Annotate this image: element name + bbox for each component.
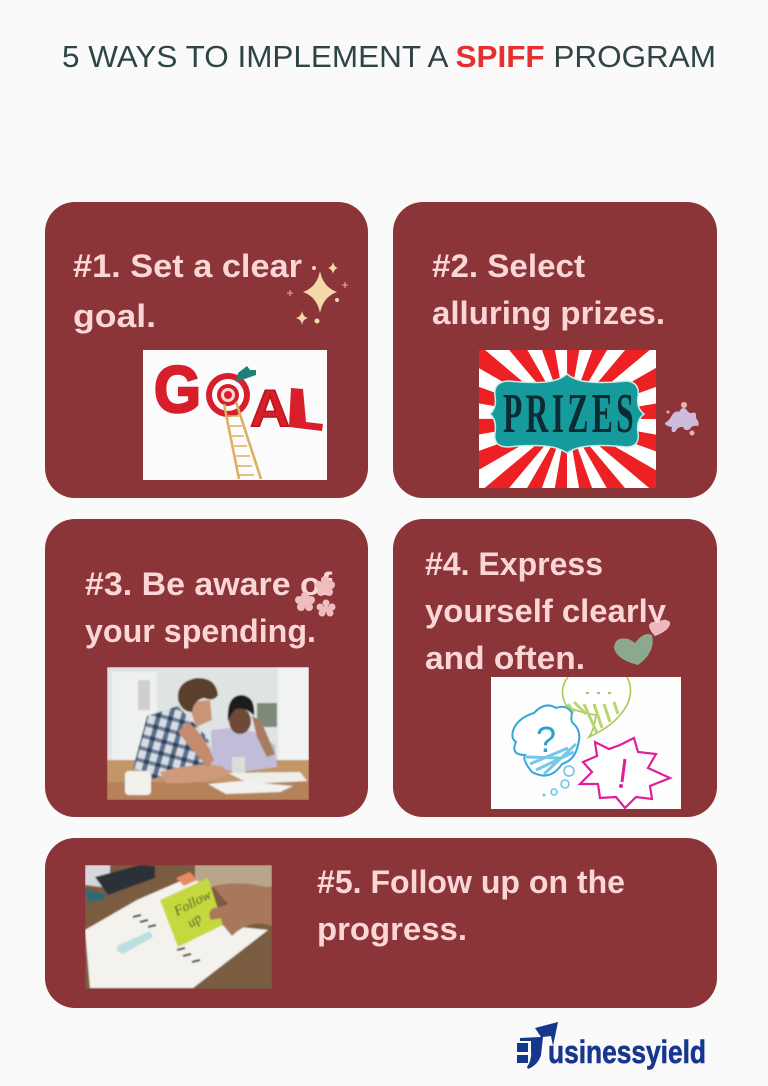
panel: step 4 bbox=[393, 519, 717, 817]
logo: Businessyield bbox=[517, 1022, 706, 1070]
image: speech bubbles: ? bbox=[536, 719, 556, 760]
heading: step 4 bbox=[425, 546, 666, 676]
heading: step 3 bbox=[85, 566, 332, 649]
heading: step 3: your spending. bbox=[85, 613, 316, 649]
heading: step 4: and often. bbox=[425, 640, 585, 676]
image: follow up note bbox=[85, 865, 272, 989]
heading: step 3: #3. Be aware of bbox=[85, 566, 332, 602]
image: follow up note: Follow bbox=[171, 887, 214, 920]
image: prizes banner: PRIZES bbox=[503, 383, 637, 445]
heading: step 5 bbox=[317, 864, 625, 947]
heading: step 2: #2. Select bbox=[432, 248, 585, 284]
icon: hearts bbox=[614, 620, 670, 665]
heading: step 1: #1. Set a clear bbox=[73, 248, 302, 284]
image: couple reviewing bills bbox=[107, 667, 309, 800]
image: goal target: A bbox=[250, 380, 290, 438]
heading: step 2 bbox=[432, 248, 665, 331]
logo: Businessyield: usinessyield bbox=[548, 1034, 706, 1070]
heading: step 2: alluring prizes. bbox=[432, 295, 665, 331]
icon: sparkles bbox=[287, 262, 348, 325]
icon: paint splash bbox=[665, 402, 699, 436]
image: goal target bbox=[143, 350, 327, 480]
image: prizes banner bbox=[479, 350, 656, 488]
heading: step 5: #5. Follow up on the bbox=[317, 864, 625, 900]
panel: step 1 bbox=[45, 202, 368, 498]
image: follow up note: up bbox=[185, 911, 205, 931]
image: goal target: G bbox=[154, 352, 201, 426]
panel: step 5 bbox=[45, 838, 717, 1008]
heading: step 1 bbox=[73, 248, 302, 334]
heading: step 5: progress. bbox=[317, 911, 467, 947]
heading: step 1: goal. bbox=[73, 298, 156, 334]
heading: step 4: yourself clearly bbox=[425, 593, 666, 629]
panel: step 3 bbox=[45, 519, 368, 817]
image: speech bubbles bbox=[491, 677, 681, 809]
title: 5 WAYS TO IMPLEMENT A SPIFF PROGRAM bbox=[62, 39, 716, 74]
heading: step 4: #4. Express bbox=[425, 546, 603, 582]
icon: flowers bbox=[295, 576, 336, 616]
panel: step 2 bbox=[393, 202, 717, 498]
